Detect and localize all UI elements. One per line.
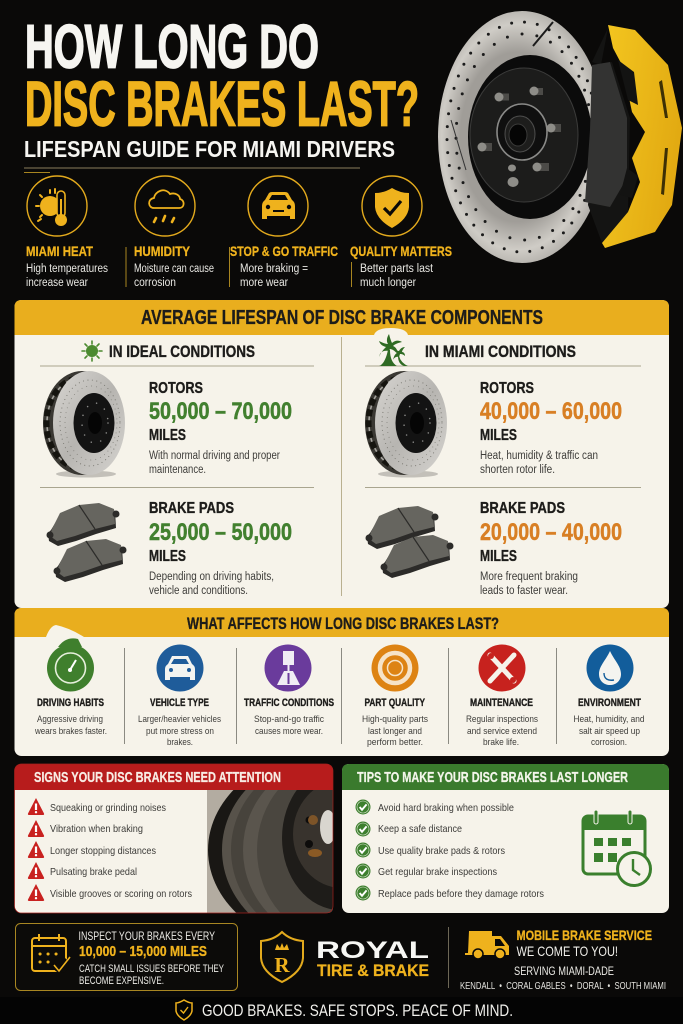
mobile brake service xyxy=(460,927,666,992)
brake pads lifespan: MILES xyxy=(149,548,186,565)
heading: WHAT AFFECTS HOW LONG DISC BRAKES LAST? xyxy=(187,615,499,633)
warning list: Visible grooves or scoring on rotors xyxy=(50,888,192,900)
tips list: Avoid hard braking when possible xyxy=(378,802,514,814)
tips list: Get regular brake inspections xyxy=(378,866,497,878)
factor row: Miami conditions xyxy=(26,176,452,289)
factor: part quality: PART QUALITY xyxy=(364,697,425,709)
quality text: much longer xyxy=(360,277,416,289)
icon: crossed tools xyxy=(478,644,526,692)
tips list: Keep a safe distance xyxy=(378,823,462,835)
stop and go text xyxy=(230,243,338,289)
mobile brake service: WE COME TO YOU! xyxy=(516,943,618,959)
factor: traffic conditions xyxy=(244,644,334,737)
image: brake pads xyxy=(366,506,454,578)
mobile brake service: SERVING MIAMI-DADE xyxy=(514,966,614,978)
callout: inspect your brakes: CATCH SMALL ISSUES BEFORE THEY xyxy=(79,963,224,975)
factor: maintenance xyxy=(466,644,538,748)
callout: inspect your brakes xyxy=(16,924,238,990)
caliper bracket and brake pad xyxy=(588,28,630,243)
brake pads lifespan: leads to faster wear. xyxy=(480,585,568,597)
icon: palm trees xyxy=(379,334,408,366)
callout: inspect your brakes: INSPECT YOUR BRAKES EVERY xyxy=(78,931,215,943)
panel: average lifespan xyxy=(14,300,669,608)
rotors lifespan: 50,000 – 70,000 xyxy=(149,398,292,425)
footer banner xyxy=(0,997,683,1024)
factor: part quality: last longer and xyxy=(368,726,422,737)
logo: Royal Tire and Brake: TIRE & BRAKE xyxy=(317,962,429,980)
brake pads lifespan xyxy=(149,500,292,597)
image: rotor xyxy=(43,371,125,478)
warning list: Longer stopping distances xyxy=(50,845,156,857)
factor: environment: salt air speed up xyxy=(579,726,640,737)
tips list: Use quality brake pads & rotors xyxy=(378,845,505,857)
factor: vehicle type xyxy=(138,644,221,748)
panel: warning signs xyxy=(14,764,334,914)
heading: Miami: IN MIAMI CONDITIONS xyxy=(425,343,576,361)
icon: calendar and clock xyxy=(583,810,650,886)
rotors lifespan: 40,000 – 60,000 xyxy=(480,398,622,425)
icon: brake disc xyxy=(372,644,418,692)
factor: maintenance: Regular inspections xyxy=(466,714,538,725)
illustration: brake rotor and caliper xyxy=(438,11,682,263)
image: rotor xyxy=(365,371,447,478)
factor: part quality: perform better. xyxy=(367,737,423,748)
brake pads lifespan: BRAKE PADS xyxy=(149,500,234,517)
rotors lifespan xyxy=(149,380,292,476)
warning list: Squeaking or grinding noises xyxy=(50,802,166,814)
image: brake pads xyxy=(46,503,126,582)
panel: what affects brake life xyxy=(14,608,669,756)
factor: maintenance: MAINTENANCE xyxy=(470,697,533,709)
factor: vehicle type: VEHICLE TYPE xyxy=(150,697,209,709)
column: Miami conditions xyxy=(365,334,641,597)
title xyxy=(25,12,419,140)
stop and go text: more wear xyxy=(240,277,288,289)
rotors lifespan: MILES xyxy=(480,427,517,444)
factor: environment xyxy=(574,644,644,748)
factor: driving habits xyxy=(34,638,107,737)
factor: environment: ENVIRONMENT xyxy=(578,697,641,709)
title: HOW LONG DO xyxy=(25,12,319,80)
factor: maintenance: and service extend xyxy=(467,726,537,737)
icon: truck xyxy=(465,931,509,959)
image: worn rotor photo xyxy=(207,790,333,913)
logo: Royal Tire and Brake xyxy=(261,932,429,982)
title: DISC BRAKES LAST? xyxy=(25,70,419,140)
factor: vehicle type: put more stress on xyxy=(146,726,214,737)
icon: water drop xyxy=(586,644,634,692)
icon: shield check xyxy=(362,176,422,236)
brake pads lifespan: 25,000 – 50,000 xyxy=(149,519,292,546)
icon: speedometer xyxy=(47,638,94,692)
factor: traffic conditions: TRAFFIC CONDITIONS xyxy=(244,697,334,709)
icon: rain cloud xyxy=(135,176,195,236)
callout: inspect your brakes: 10,000 – 15,000 MILES xyxy=(79,944,207,960)
heading: AVERAGE LIFESPAN OF DISC BRAKE COMPONENTS xyxy=(141,307,543,329)
rotors lifespan: ROTORS xyxy=(480,380,534,397)
rotors lifespan: Heat, humidity & traffic can xyxy=(480,450,598,462)
icon: calendar check xyxy=(32,934,70,973)
column: ideal conditions xyxy=(40,341,314,597)
warning list xyxy=(28,798,192,901)
stop and go text: More braking = xyxy=(240,263,308,275)
panel: tips xyxy=(342,764,669,913)
icon: car xyxy=(248,176,308,236)
icon: road and sign xyxy=(264,644,312,692)
humidity text xyxy=(134,243,214,289)
factor: vehicle type: Larger/heavier vehicles xyxy=(138,714,221,725)
tips list: Replace pads before they damage rotors xyxy=(378,888,544,900)
footer banner: GOOD BRAKES. SAFE STOPS. PEACE OF MIND. xyxy=(202,1001,513,1020)
stop and go text: STOP & GO TRAFFIC xyxy=(230,243,338,259)
heading: ideal: IN IDEAL CONDITIONS xyxy=(109,343,255,361)
brake pads lifespan: More frequent braking xyxy=(480,571,578,583)
humidity text: corrosion xyxy=(134,277,176,289)
warning list: Pulsating brake pedal xyxy=(50,866,137,878)
brake pads lifespan: MILES xyxy=(480,548,517,565)
factor: driving habits: Aggressive driving xyxy=(37,714,103,725)
heading: SIGNS YOUR DISC BRAKES NEED ATTENTION xyxy=(34,770,281,786)
quality text: Better parts last xyxy=(360,263,434,275)
quality text: QUALITY MATTERS xyxy=(350,243,452,259)
icon: car xyxy=(156,644,204,692)
brake pads lifespan: 20,000 – 40,000 xyxy=(480,519,622,546)
logo: Royal Tire and Brake: ROYAL xyxy=(316,937,429,964)
warning list: Vibration when braking xyxy=(50,823,143,835)
rotors lifespan: MILES xyxy=(149,427,186,444)
factor: driving habits: DRIVING HABITS xyxy=(37,697,104,709)
rotors lifespan xyxy=(480,380,622,476)
icon: heat sun and thermometer xyxy=(27,176,87,236)
wheel studs xyxy=(478,86,561,187)
header section xyxy=(24,12,419,173)
humidity text: Moisture can cause xyxy=(134,263,214,275)
factor: part quality: High-quality parts xyxy=(362,714,428,725)
Miami heat text: High temperatures xyxy=(26,263,108,275)
Miami heat text: increase wear xyxy=(26,277,88,289)
factor: traffic conditions: causes more wear. xyxy=(255,726,323,737)
brake pads lifespan: vehicle and conditions. xyxy=(149,585,248,597)
Miami heat text: MIAMI HEAT xyxy=(26,243,93,259)
brake pads lifespan xyxy=(480,500,622,597)
icon: shield: R xyxy=(274,953,290,977)
humidity text: HUMIDITY xyxy=(134,243,191,259)
caliper xyxy=(602,25,682,248)
icon: sun xyxy=(82,341,102,361)
factor: driving habits: wears brakes faster. xyxy=(34,726,107,737)
factor: environment: corrosion. xyxy=(591,737,627,748)
factor: maintenance: brake life. xyxy=(483,737,519,748)
factor: traffic conditions: Stop-and-go traffic xyxy=(254,714,324,725)
brake pads lifespan: Depending on driving habits, xyxy=(149,571,274,583)
factor: environment: Heat, humidity, and xyxy=(574,714,644,725)
brake pads lifespan: BRAKE PADS xyxy=(480,500,565,517)
factor: vehicle type: brakes. xyxy=(167,737,193,748)
icon: shield xyxy=(261,932,303,982)
tips list xyxy=(356,800,544,900)
icon: shield check xyxy=(176,1000,192,1020)
factor: part quality xyxy=(362,644,428,748)
rotors lifespan: ROTORS xyxy=(149,380,203,397)
quality text xyxy=(350,243,452,289)
rotors lifespan: maintenance. xyxy=(149,464,206,476)
callout: inspect your brakes: BECOME EXPENSIVE. xyxy=(79,975,164,987)
rotors lifespan: With normal driving and proper xyxy=(149,450,280,462)
subtitle: LIFESPAN GUIDE FOR MIAMI DRIVERS xyxy=(24,136,395,162)
rotors lifespan: shorten rotor life. xyxy=(480,464,555,476)
Miami heat text xyxy=(26,243,108,289)
